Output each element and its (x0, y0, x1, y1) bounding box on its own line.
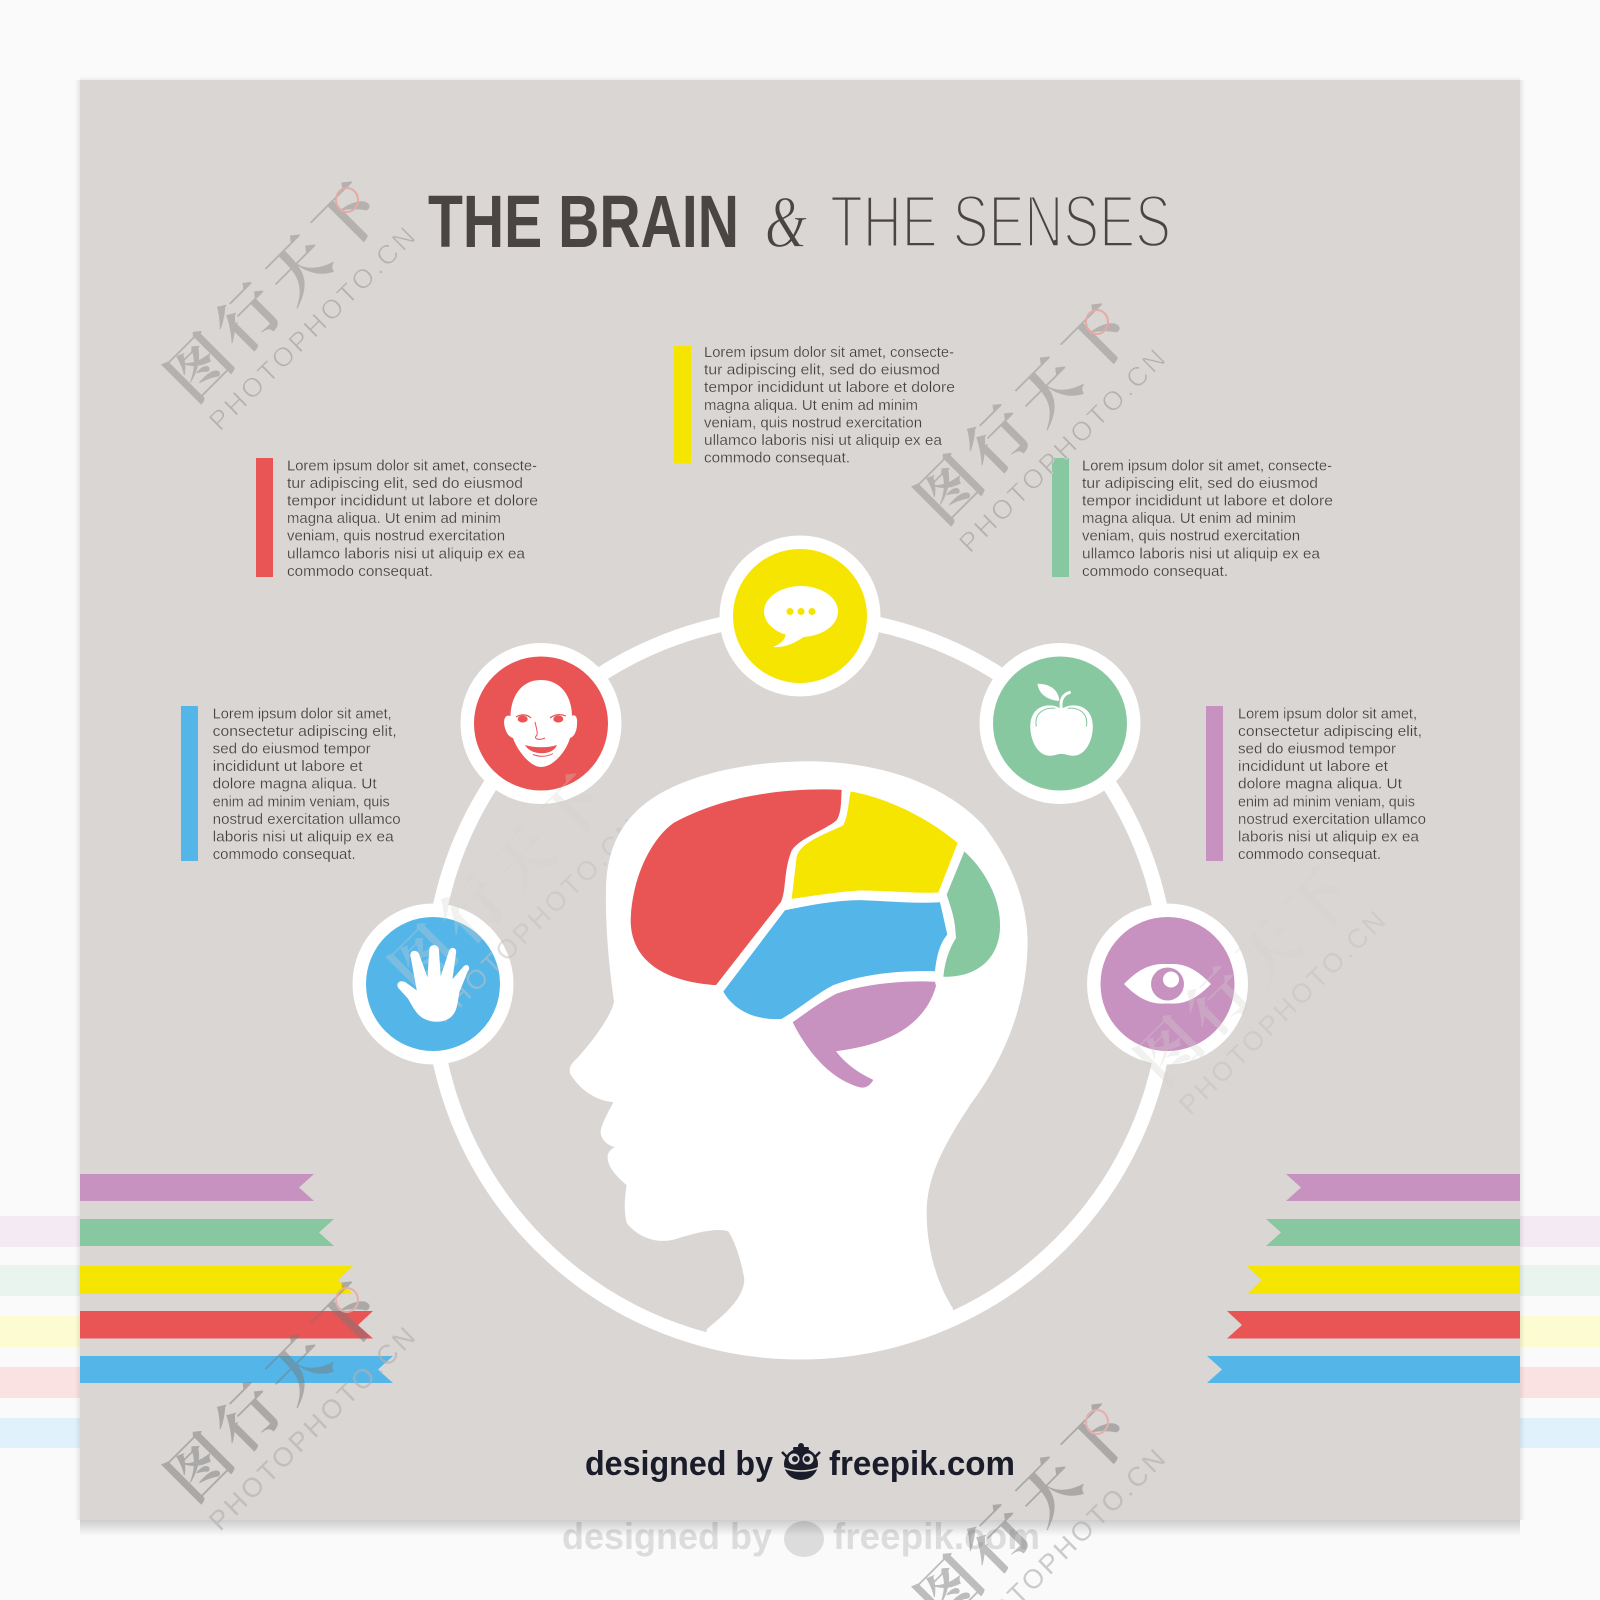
text block: green: tur adipiscing elit, sed do eiusmod (1082, 475, 1318, 492)
watermark: bottom left: 图行天下 (155, 1274, 396, 1515)
text block: green: Lorem ipsum dolor sit amet, consecte- (1082, 457, 1332, 474)
watermark: top left: 图行天下 (155, 174, 396, 415)
watermark: right: 图行天下 (1125, 858, 1366, 1099)
text block: yellow: tempor incididunt ut labore et dolore (704, 379, 955, 396)
sense: taste (980, 643, 1140, 804)
footer credit (585, 1443, 1015, 1483)
text block: red: Lorem ipsum dolor sit amet, consecte- (287, 457, 537, 474)
icon: speech bubble (764, 586, 838, 647)
text block: blue (181, 705, 401, 863)
text block: red: ullamco laboris nisi ut aliquip ex ea (287, 545, 526, 562)
text block: yellow: magna aliqua. Ut enim ad minim (704, 397, 918, 414)
text block: purple: consectetur adipiscing elit, (1238, 723, 1422, 740)
text block: purple: Lorem ipsum dolor sit amet, (1238, 705, 1417, 722)
title: THE SENSES (830, 180, 1171, 263)
text block: green: magna aliqua. Ut enim ad minim (1082, 510, 1296, 527)
text block: purple: sed do eiusmod tempor (1238, 740, 1396, 758)
text block: purple (1206, 705, 1426, 863)
text block: red: magna aliqua. Ut enim ad minim (287, 510, 501, 527)
text block: blue: sed do eiusmod tempor (213, 740, 371, 758)
watermark: top right: PHOTOPHOTO.CN (953, 343, 1171, 558)
text block: purple: nostrud exercitation ullamco (1238, 811, 1426, 828)
sense: touch (352, 904, 514, 1064)
text block: purple: enim ad minim veniam, quis (1238, 793, 1415, 810)
text block: purple: laboris nisi ut aliquip ex ea (1238, 828, 1420, 846)
reflected footer credit (562, 1516, 1040, 1557)
sense: face (460, 643, 622, 804)
icon: freepik robot (782, 1443, 820, 1480)
title: THE BRAIN (428, 180, 739, 263)
text block: blue: enim ad minim veniam, quis (213, 793, 390, 810)
brain: frontal lobe (631, 789, 842, 985)
footer credit: designed by (585, 1445, 773, 1483)
page reflection of ribbons, right side (1520, 1216, 1600, 1448)
icon: apple (1030, 684, 1093, 756)
title (428, 180, 1171, 264)
text block: green: commodo consequat. (1082, 563, 1228, 580)
icon: smiling face (504, 680, 577, 767)
text block: red: tempor incididunt ut labore et dolore (287, 492, 538, 510)
text block: purple: incididunt ut labore et (1238, 758, 1389, 775)
text block: blue: laboris nisi ut aliquip ex ea (213, 828, 394, 846)
ribbons: right (1207, 1174, 1520, 1383)
icon: eye (1124, 964, 1211, 1004)
text block: green: veniam, quis nostrud exercitation (1082, 528, 1300, 545)
ring connecting the senses (432, 616, 1168, 1352)
text block: blue: commodo consequat. (213, 846, 356, 863)
text block: blue: Lorem ipsum dolor sit amet, (213, 705, 392, 722)
text block: yellow: tur adipiscing elit, sed do eiusmod (704, 362, 940, 379)
watermark: bottom left: PHOTOPHOTO.CN (203, 1321, 421, 1536)
icon: hand (397, 945, 469, 1022)
title: & (765, 182, 807, 264)
sense: sight (1087, 904, 1248, 1064)
text block: blue: nostrud exercitation ullamco (213, 811, 401, 828)
head silhouette (570, 761, 1028, 1402)
reflected footer credit: designed by (562, 1516, 772, 1557)
text block: red: veniam, quis nostrud exercitation (287, 528, 505, 545)
text block: green: ullamco laboris nisi ut aliquip ex ea (1082, 545, 1321, 562)
text block: red: tur adipiscing elit, sed do eiusmod (287, 475, 523, 492)
text block: purple: dolore magna aliqua. Ut (1238, 776, 1403, 793)
text block: yellow: veniam, quis nostrud exercitation (704, 414, 922, 431)
watermark: center: 图行天下 (379, 766, 620, 1007)
text block: yellow: Lorem ipsum dolor sit amet, consecte- (704, 344, 954, 361)
text block: blue: incididunt ut labore et (213, 758, 364, 775)
text block: yellow: ullamco laboris nisi ut aliquip ex ea (704, 432, 943, 449)
text block: red (256, 457, 538, 580)
sense: speech (720, 536, 880, 696)
brain: occipital lobe (943, 851, 1000, 977)
watermark: top left: PHOTOPHOTO.CN (203, 221, 421, 436)
text block: green (1052, 457, 1333, 580)
reflected footer credit: freepik.com (833, 1516, 1040, 1557)
footer credit: freepik.com (829, 1445, 1015, 1483)
brain: temporal lobe (723, 900, 947, 1019)
watermark: right: PHOTOPHOTO.CN (1173, 905, 1391, 1120)
text block: purple: commodo consequat. (1238, 846, 1381, 863)
brain: cerebellum (793, 981, 936, 1088)
watermark: center: PHOTOPHOTO.CN (427, 813, 645, 1028)
brain: parietal lobe (792, 792, 958, 899)
text block: blue: dolore magna aliqua. Ut (213, 776, 378, 793)
page reflection of ribbons, left side (0, 1216, 80, 1448)
text block: blue: consectetur adipiscing elit, (213, 723, 397, 740)
text block: red: commodo consequat. (287, 563, 433, 580)
text block: green: tempor incididunt ut labore et dolore (1082, 492, 1333, 510)
head with brain (570, 761, 1028, 1402)
text block: yellow (674, 344, 955, 467)
ribbons: left (80, 1174, 393, 1383)
watermark: top right: 图行天下 (905, 296, 1146, 537)
text block: yellow: commodo consequat. (704, 450, 850, 467)
